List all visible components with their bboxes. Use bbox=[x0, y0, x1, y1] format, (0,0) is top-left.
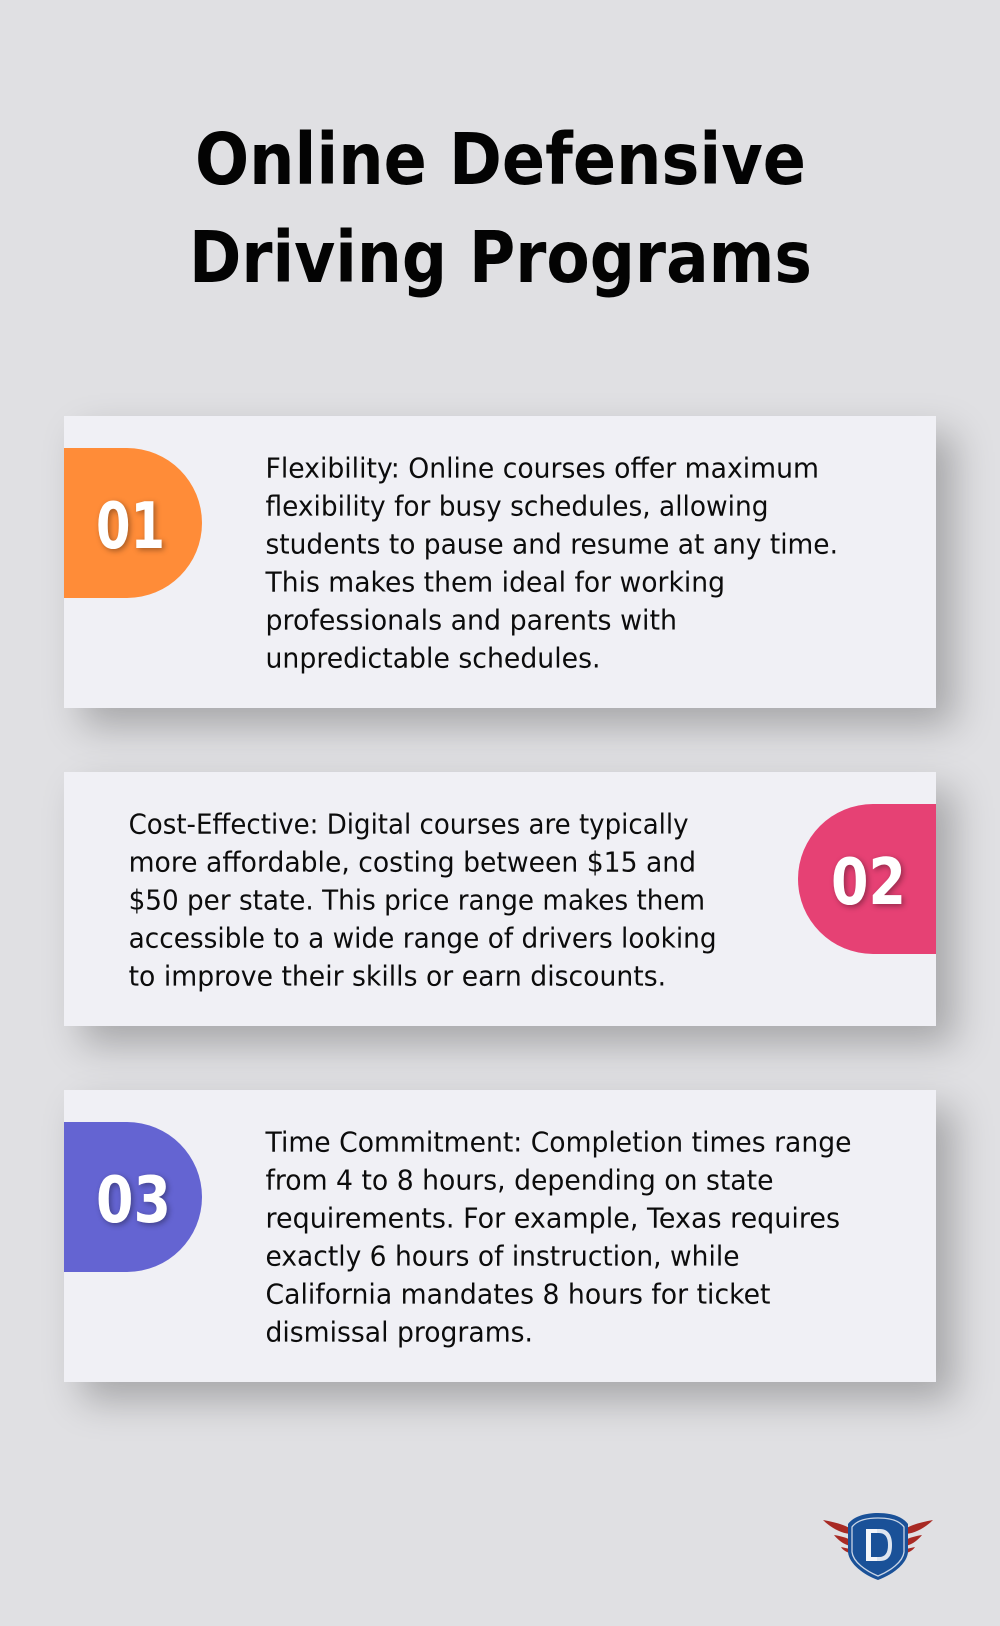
text: cost-effective: accessible to a wide range of drivers looking bbox=[129, 923, 717, 955]
badge 01: 01 bbox=[96, 490, 165, 564]
text: time commitment: exactly 6 hours of instruction, while bbox=[266, 1241, 740, 1273]
text: flexibility: flexibility for busy schedules, allowing bbox=[266, 491, 768, 523]
text: flexibility: students to pause and resume at any time. bbox=[266, 529, 838, 561]
text: flexibility: professionals and parents with bbox=[266, 605, 677, 637]
text: time commitment: dismissal programs. bbox=[266, 1317, 533, 1349]
text: time commitment: from 4 to 8 hours, depending on state bbox=[266, 1165, 774, 1197]
badge 03 bbox=[64, 1122, 202, 1272]
text: cost-effective: more affordable, costing between $15 and bbox=[129, 847, 696, 879]
text: cost-effective: to improve their skills or earn discounts. bbox=[129, 961, 666, 993]
text: time commitment: Time Commitment: Completion times range bbox=[265, 1127, 852, 1159]
title: Online Defensive bbox=[195, 118, 806, 201]
title bbox=[189, 118, 812, 299]
title: Driving Programs bbox=[189, 216, 812, 299]
text: flexibility: This makes them ideal for working bbox=[265, 567, 725, 599]
text: cost-effective: Cost-Effective: Digital courses are typically bbox=[129, 809, 689, 841]
badge 02 bbox=[798, 804, 936, 954]
text: flexibility: unpredictable schedules. bbox=[266, 643, 600, 675]
badge 01 bbox=[64, 448, 202, 598]
text: time commitment: California mandates 8 hours for ticket bbox=[266, 1279, 771, 1311]
badge 03: 03 bbox=[96, 1164, 171, 1238]
panel: flexibility bbox=[64, 416, 936, 708]
text: cost-effective bbox=[129, 809, 717, 993]
badge 02: 02 bbox=[831, 846, 906, 920]
text: time commitment bbox=[265, 1127, 852, 1349]
panel: time commitment bbox=[64, 1090, 936, 1382]
text: flexibility bbox=[265, 453, 838, 675]
text: cost-effective: $50 per state. This price range makes them bbox=[129, 885, 705, 917]
panel: cost-effective bbox=[64, 772, 936, 1026]
text: time commitment: requirements. For example, Texas requires bbox=[266, 1203, 840, 1235]
text: flexibility: Flexibility: Online courses offer maximum bbox=[266, 453, 819, 485]
